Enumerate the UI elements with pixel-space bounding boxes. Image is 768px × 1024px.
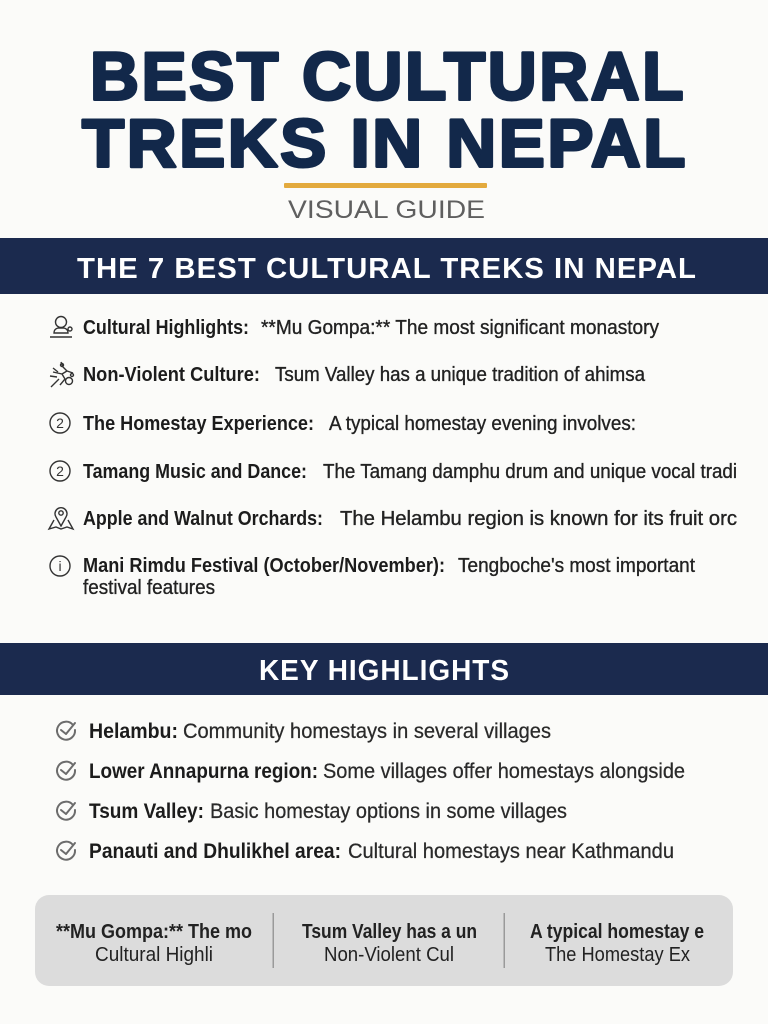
title: TREKS IN NEPAL [82,106,688,182]
row: the homestay experience: The Homestay Experience: [83,413,314,435]
icon: numbered circle: 2 [56,415,64,431]
icon: check [57,802,75,820]
section band: the 7 best cultural treks [0,238,768,294]
row: the homestay experience [50,413,636,435]
title [82,38,688,182]
title: BEST CULTURAL [90,38,686,114]
icon: numbered circle [50,413,70,433]
card: mu gompa: Cultural Highli [95,944,213,966]
card: mu gompa: **Mu Gompa:** The mo [56,921,252,943]
row: apple and walnut orchards: The Helambu region is known for its fruit orc [340,508,737,530]
row: mani rimdu festival: Mani Rimdu Festival (October/November): [83,555,445,577]
row: tamang music and dance: Tamang Music and Dance: [83,461,307,483]
row: apple and walnut orchards [49,508,737,530]
row: helambu: Community homestays in several villages [183,720,551,743]
card: tsum valley [302,921,477,966]
list: key highlights [57,720,685,863]
row: panauti and dhulikhel [57,840,674,863]
icon: check [57,762,75,780]
row: tsum valley [57,800,567,823]
row: tamang music and dance: The Tamang damphu drum and unique vocal tradi [323,461,737,483]
row: cultural highlights: **Mu Gompa:** The most significant monastory [261,317,659,339]
panel: summary cards [35,895,733,986]
card: homestay [530,921,704,966]
section band: key highlights: KEY HIGHLIGHTS [259,655,510,687]
row: mani rimdu festival [50,555,695,599]
row: non-violent culture: Tsum Valley has a unique tradition of ahimsa [275,364,646,386]
row: tamang music and dance [50,461,737,483]
row: mani rimdu festival: Tengboche's most important [458,555,695,577]
row: apple and walnut orchards: Apple and Walnut Orchards: [83,508,323,530]
row: non-violent culture: Non-Violent Culture: [83,364,260,386]
row: lower annapurna [57,760,685,783]
section band: the 7 best cultural treks: THE 7 BEST CULTURAL TREKS IN NEPAL [77,253,697,285]
row: mani rimdu festival: festival features [83,577,215,599]
icon: monastery [50,316,72,337]
row: panauti and dhulikhel: Panauti and Dhulikhel area: [89,840,341,863]
row: tsum valley: Tsum Valley: [89,800,204,823]
subtitle: VISUAL GUIDE [288,196,485,224]
icon: numbered circle: 2 [56,463,64,479]
row: lower annapurna: Lower Annapurna region: [89,760,318,783]
icon: figure with flowers [50,362,74,387]
row: the homestay experience: A typical homestay evening involves: [329,413,636,435]
card: homestay: A typical homestay e [530,921,704,943]
icon: map pin [49,508,73,529]
row: lower annapurna: Some villages offer homestays alongside [323,760,685,783]
card: homestay: The Homestay Ex [545,944,690,966]
icon: info circle: i [58,558,62,574]
row: cultural highlights [50,316,659,339]
row: non-violent culture [50,362,646,387]
card: tsum valley: Tsum Valley has a un [302,921,477,943]
icon: check [57,722,75,740]
icon: info circle [50,556,70,576]
row: panauti and dhulikhel: Cultural homestays near Kathmandu [348,840,674,863]
row: helambu: Helambu: [89,720,178,743]
row: tsum valley: Basic homestay options in some villages [210,800,567,823]
gold divider [284,183,487,188]
card: mu gompa [56,921,252,966]
list: cultural highlights [49,316,737,599]
card: tsum valley: Non-Violent Cul [324,944,454,966]
section band: key highlights [0,643,768,695]
row: cultural highlights: Cultural Highlights: [83,317,249,339]
icon: check [57,842,75,860]
icon: numbered circle [50,461,70,481]
